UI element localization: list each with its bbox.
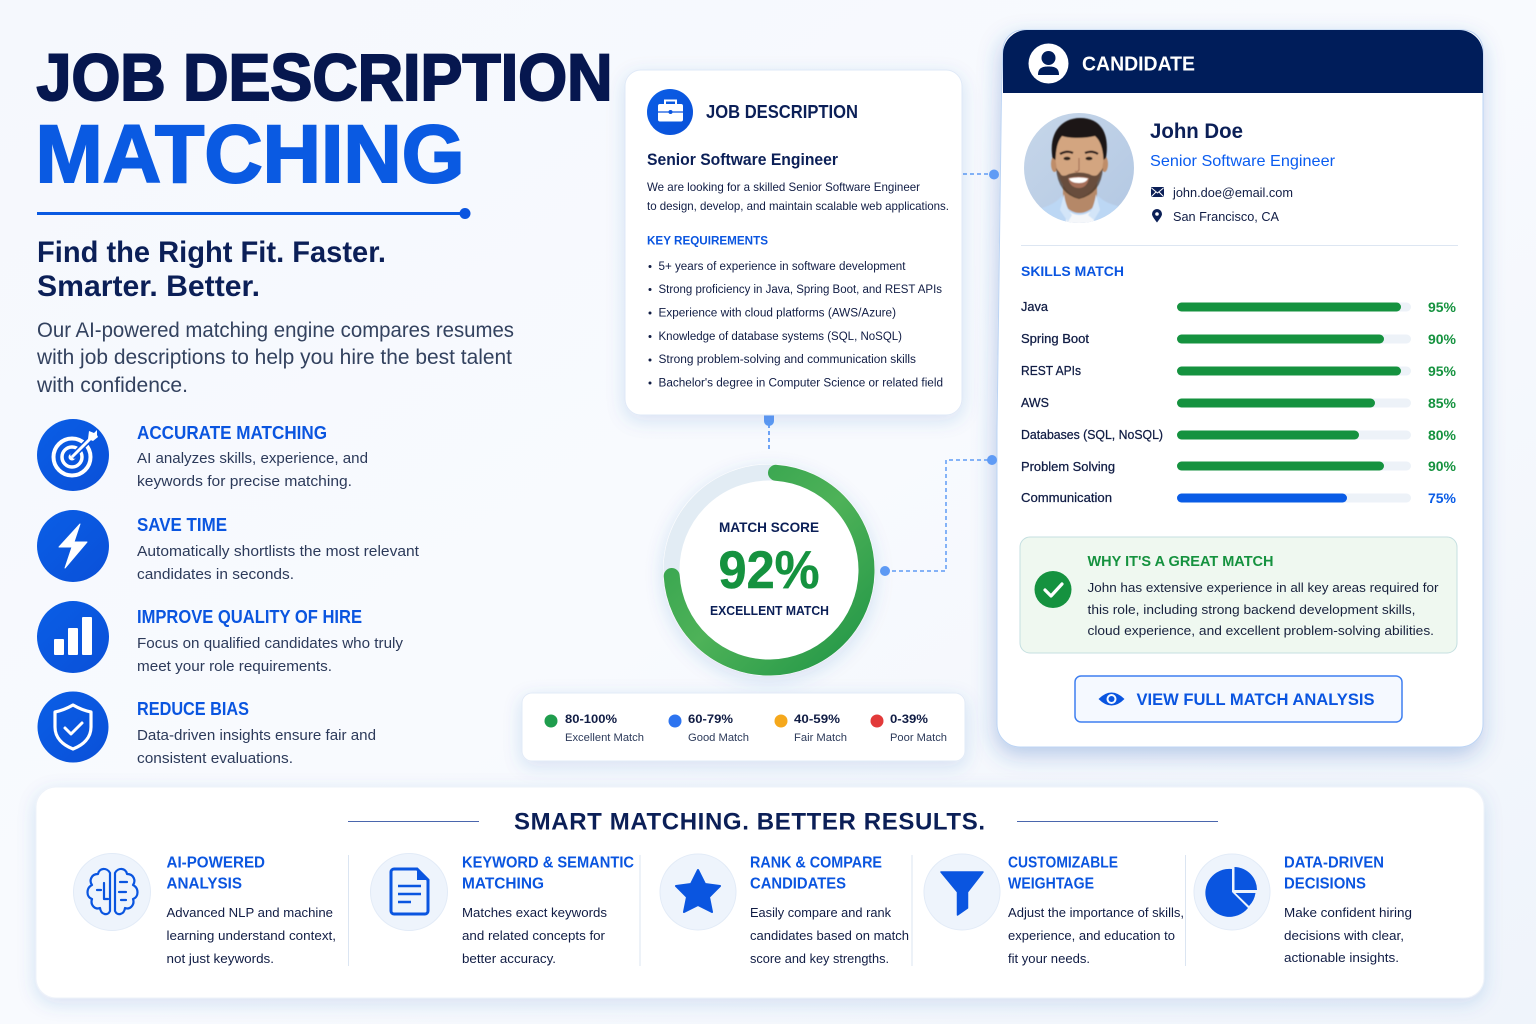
icon: mail [1151,187,1164,197]
benefit: save time: candidates in seconds. [137,566,294,583]
benefit: reduce bias: Data-driven insights ensure fair and [137,727,376,744]
candidate header [1003,30,1483,93]
feature: AI-powered analysis: ANALYSIS [166,876,242,892]
feature: AI-powered analysis [74,854,336,966]
feature: data-driven decisions: decisions with clear, [1284,928,1404,943]
skills match chart: REST APIs [1021,364,1081,378]
benefit: accurate matching: keywords for precise matching. [137,473,352,490]
panel: job description [625,70,962,415]
icon: pie chart [1194,854,1270,930]
icon: lightning bolt [37,510,109,582]
tagline: Smarter. Better. [37,270,260,303]
candidate details: john.doe@email.com [1172,185,1293,200]
feature: data-driven decisions: DECISIONS [1284,876,1366,892]
feature: customizable weightage: CUSTOMIZABLE [1008,854,1118,872]
benefit: improve quality of hire: Focus on qualified candidates who truly [137,635,404,652]
skills match chart: SKILLS MATCH [1021,263,1124,279]
candidate details: San Francisco, CA [1173,209,1279,224]
score legend: 40-59% [794,712,840,726]
skills match chart: Communication [1021,491,1112,505]
section heading: SMART MATCHING. BETTER RESULTS. [514,808,985,836]
intro paragraph: with job descriptions to help you hire the best talent [36,346,512,369]
score legend [522,693,965,761]
main title [36,40,612,200]
requirements list: 5+ years of experience in software development [658,261,906,273]
score legend: Fair Match [794,732,847,744]
feature: customizable weightage: experience, and education to [1008,928,1175,943]
benefit: accurate matching [37,419,368,491]
skills match chart: Databases (SQL, NoSQL) [1021,428,1163,442]
feature: keyword and semantic matching [370,854,634,966]
score legend: 60-79% [688,712,733,726]
feature: keyword and semantic matching: KEYWORD & SEMANTIC [462,854,634,872]
benefit: save time: Automatically shortlists the most relevant [137,543,420,560]
candidate details: Senior Software Engineer [1150,153,1336,170]
requirements list [648,261,943,390]
connector: job description to candidate [963,170,999,180]
connector: score to candidate [880,455,997,576]
benefit: save time [37,510,420,583]
benefit: improve quality of hire [37,601,404,675]
skills match chart [1021,263,1457,506]
feature: customizable weightage [924,854,1184,966]
requirements list: Strong problem-solving and communication skills [658,354,916,366]
panel: job description: JOB DESCRIPTION [706,102,858,122]
feature: AI-powered analysis: learning understand context, [166,928,336,943]
feature: AI-powered analysis: AI-POWERED [166,854,265,872]
skills match chart: 75% [1428,490,1457,506]
feature: rank and compare candidates: candidates based on match [750,928,909,943]
skills match chart: 95% [1428,363,1457,379]
button: view full match analysis: VIEW FULL MATCH ANALYSIS [1136,690,1374,709]
feature: data-driven decisions: actionable insights. [1284,950,1399,965]
benefit: reduce bias: REDUCE BIAS [137,699,249,719]
score legend: 80-100% [565,712,617,726]
title underline [37,208,470,219]
benefit: improve quality of hire: meet your role requirements. [137,658,332,675]
icon: eye [1098,692,1124,706]
skills match chart: AWS [1021,396,1049,410]
icon: target [37,419,109,491]
feature: AI-powered analysis: not just keywords. [166,951,274,966]
requirements list: Knowledge of database systems (SQL, NoSQL) [658,331,902,343]
icon: brain [74,854,150,930]
candidate header: CANDIDATE [1082,52,1195,76]
panel: job description: Senior Software Engineer [647,151,839,169]
intro paragraph: Our AI-powered matching engine compares resumes [37,319,514,342]
feature: data-driven decisions [1194,854,1412,965]
score legend: Excellent Match [565,732,644,744]
skills match chart: 80% [1428,427,1457,443]
score legend: Poor Match [890,732,947,744]
icon: shield [38,692,108,762]
panel: job description: KEY REQUIREMENTS [647,234,768,248]
callout: why it's a great match [1020,537,1457,653]
match score gauge: 92% [718,541,820,600]
skills match chart: 95% [1428,299,1457,315]
feature: customizable weightage: WEIGHTAGE [1008,876,1094,892]
score legend: Good Match [688,732,749,744]
feature: rank and compare candidates [660,854,909,966]
callout: why it's a great match: WHY IT'S A GREAT MATCH [1088,554,1274,570]
match score gauge: MATCH SCORE [719,519,819,535]
benefit: accurate matching: AI analyzes skills, experience, and [137,450,368,467]
feature: keyword and semantic matching: better accuracy. [462,951,556,966]
requirements list: Experience with cloud platforms (AWS/Azure) [658,308,896,320]
feature: data-driven decisions: DATA-DRIVEN [1284,854,1384,872]
panel: job description: to design, develop, and maintain scalable web applications. [647,199,949,213]
callout: why it's a great match: John has extensive experience in all key areas required for [1088,580,1439,595]
score legend: 0-39% [890,712,928,726]
match score gauge: EXCELLENT MATCH [710,603,829,618]
benefit: save time: SAVE TIME [137,515,227,535]
benefit: accurate matching: ACCURATE MATCHING [137,423,327,443]
icon: bar chart [37,601,109,673]
main title: MATCHING [36,109,464,200]
icon: briefcase [647,89,693,135]
icon: location pin [1152,209,1162,222]
skills match chart: 90% [1428,331,1457,347]
candidate photo [1024,113,1134,228]
intro paragraph [36,319,514,397]
feature: AI-powered analysis: Advanced NLP and machine [166,905,333,920]
connector: job description to score [764,415,774,451]
feature: data-driven decisions: Make confident hiring [1284,905,1412,920]
button: view full match analysis [1075,676,1402,722]
tagline [37,236,386,303]
main title: JOB DESCRIPTION [36,40,612,114]
icon: document [370,854,448,930]
skills match chart: Problem Solving [1021,460,1115,474]
feature: rank and compare candidates: score and key strengths. [750,951,889,966]
feature: keyword and semantic matching: MATCHING [462,876,544,892]
candidate details [1150,120,1336,224]
feature: keyword and semantic matching: Matches exact keywords [462,905,607,920]
skills match chart: 85% [1428,395,1457,411]
feature: customizable weightage: fit your needs. [1008,951,1090,966]
icon: star [660,854,736,930]
benefit: reduce bias [38,692,376,767]
skills match chart: Spring Boot [1021,332,1090,346]
match score gauge [663,464,875,676]
skills match chart: 90% [1428,458,1457,474]
feature: rank and compare candidates: Easily compare and rank [750,905,891,920]
panel: smart matching [36,787,1484,998]
tagline: Find the Right Fit. Faster. [37,236,386,269]
callout: why it's a great match: cloud experience, and excellent problem-solving abilities. [1088,623,1434,638]
panel: job description: We are looking for a skilled Senior Software Engineer [647,180,920,194]
callout: why it's a great match: this role, including strong backend development skills, [1088,602,1416,617]
feature: customizable weightage: Adjust the importance of skills, [1008,905,1184,920]
requirements list: Bachelor's degree in Computer Science or related field [658,378,943,390]
requirements list: Strong proficiency in Java, Spring Boot, and REST APIs [658,284,942,296]
benefit: improve quality of hire: IMPROVE QUALITY OF HIRE [137,607,362,627]
panel: candidate [997,30,1483,747]
skills match chart: Java [1021,300,1048,314]
candidate details: John Doe [1150,120,1243,143]
feature: rank and compare candidates: RANK & COMPARE [750,854,882,872]
feature: rank and compare candidates: CANDIDATES [750,876,846,892]
benefit: reduce bias: consistent evaluations. [137,750,293,767]
icon: funnel [924,854,1000,930]
feature: keyword and semantic matching: and related concepts for [462,928,606,943]
intro paragraph: with confidence. [36,374,188,397]
icon: check circle [1034,571,1072,608]
